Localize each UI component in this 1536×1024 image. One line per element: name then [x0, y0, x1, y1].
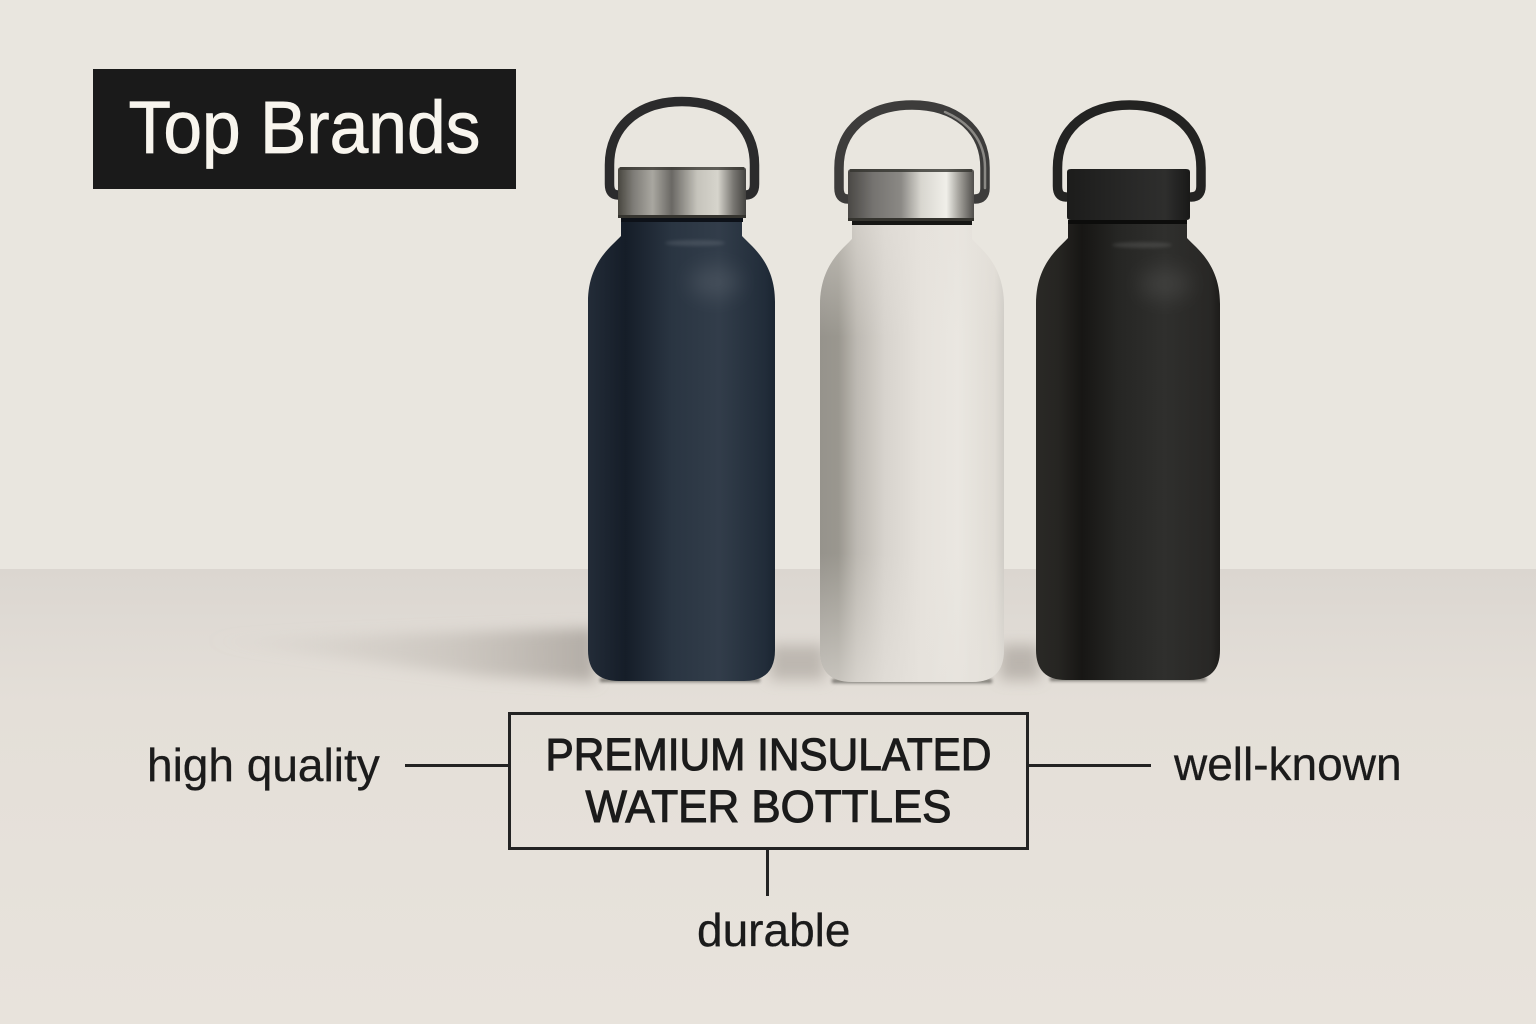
handle — [610, 102, 754, 195]
connector: left — [405, 764, 508, 767]
line one: PREMIUM INSULATED — [546, 729, 991, 780]
title text: Top Brands — [129, 86, 480, 169]
title badge — [93, 69, 516, 189]
black body — [1036, 221, 1220, 680]
line two: WATER BOTTLES — [586, 781, 951, 832]
handle — [1058, 105, 1201, 197]
steel lid — [848, 169, 974, 221]
bottle: white with steel lid — [820, 105, 1004, 682]
table surface — [0, 569, 1536, 1024]
steel lid — [618, 167, 746, 218]
background wall — [0, 0, 1536, 569]
white body — [820, 222, 1004, 682]
bottle: navy with steel lid — [588, 102, 775, 681]
bottle shadows — [200, 628, 1206, 683]
label: durable: durable — [697, 904, 850, 956]
label: well-known: well-known — [1174, 738, 1402, 790]
handle — [839, 105, 985, 199]
navy body — [588, 219, 775, 681]
center label box — [508, 712, 1029, 850]
body highlights — [1112, 242, 1191, 300]
black lid — [1067, 169, 1190, 220]
bottle: black — [1036, 105, 1220, 680]
body highlights — [665, 240, 741, 298]
connector: right — [1029, 764, 1151, 767]
label: high quality: high quality — [147, 739, 380, 791]
connector: bottom — [766, 850, 769, 896]
